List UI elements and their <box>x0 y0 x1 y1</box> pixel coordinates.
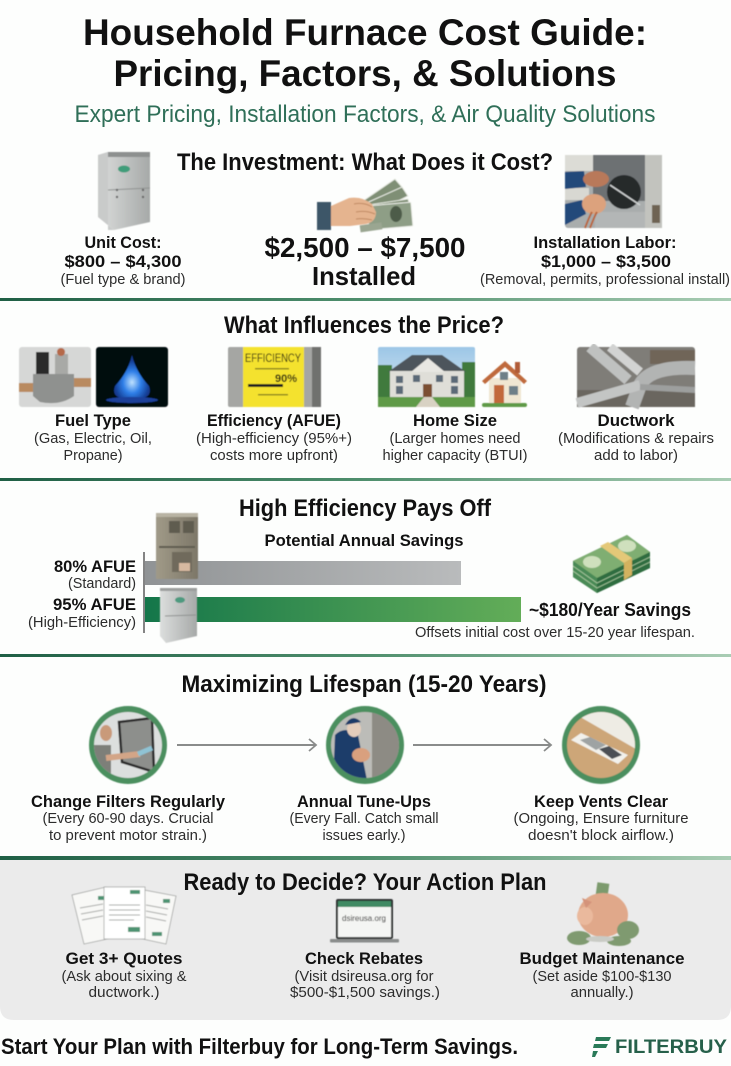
text: ductwork: Ductwork <box>598 411 675 430</box>
text: efficiency: costs more upfront) <box>210 448 338 464</box>
text: change filters <box>31 792 226 844</box>
photo: efficiency label: EFFICIENCY <box>245 351 301 365</box>
text: annual tune-ups: issues early.) <box>322 828 406 844</box>
text: 80% AFUE label: (Standard) <box>68 576 136 592</box>
text: home size: Home Size <box>413 411 497 430</box>
heading: maximizing lifespan: Maximizing Lifespan (15-20 Years) <box>182 671 546 698</box>
photo: technician at furnace <box>565 155 662 228</box>
text: unit cost: Unit Cost: <box>84 233 162 252</box>
text: get quotes: (Ask about sixing & <box>62 969 187 985</box>
bar: 80% AFUE <box>145 561 461 585</box>
footer call to action: Start Your Plan with Filterbuy for Long-Term Savings. <box>1 1034 518 1059</box>
text: savings callout: ~$180/Year Savings <box>529 600 691 620</box>
text: check rebates: (Visit dsireusa.org for <box>294 969 434 985</box>
text: unit cost <box>60 233 186 288</box>
text: home size: higher capacity (BTUI) <box>382 448 528 464</box>
title: Pricing, Factors, & Solutions <box>114 53 616 94</box>
heading: the investment: The Investment: What Does it Cost? <box>177 149 553 176</box>
text: 80% AFUE label: 80% AFUE <box>54 557 136 576</box>
text: fuel type: Fuel Type <box>55 411 131 430</box>
logo: Filterbuy <box>592 1037 727 1058</box>
text: efficiency: (High-efficiency (95%+) <box>196 431 352 447</box>
photo: large house <box>378 347 475 407</box>
logo wordmark: FILTERBUY <box>615 1037 727 1058</box>
panel: high efficiency pays off <box>28 495 695 643</box>
icon: high-efficiency furnace <box>160 588 197 643</box>
text: installation labor: (Removal, permits, professional install) <box>480 272 730 288</box>
text: efficiency <box>196 411 352 464</box>
icon: laptop: dsireusa.org <box>342 914 386 923</box>
text: change filters: Change Filters Regularly <box>31 792 226 811</box>
icon: small house <box>482 361 527 407</box>
text: efficiency: Efficiency (AFUE) <box>207 411 341 430</box>
text: total installed price <box>264 232 466 291</box>
title <box>83 12 647 94</box>
text: get quotes: Get 3+ Quotes <box>66 949 182 968</box>
text: budget maintenance: annually.) <box>570 985 634 1001</box>
panel: the investment <box>60 149 730 291</box>
text: 95% AFUE label: (High-Efficiency) <box>28 615 136 631</box>
bar chart: annual savings <box>144 552 521 633</box>
icon: logo mark <box>592 1037 611 1057</box>
text: savings callout <box>415 600 695 641</box>
heading: action plan: Ready to Decide? Your Action Plan <box>184 869 546 896</box>
title: Household Furnace Cost Guide: <box>83 12 647 53</box>
text: budget maintenance: (Set aside $100-$130 <box>532 969 672 985</box>
panel: what influences the price <box>19 312 714 464</box>
photo: ductwork <box>577 347 695 407</box>
panel: maximizing lifespan <box>31 671 688 844</box>
text: check rebates <box>290 949 440 1001</box>
icon: stack of cash <box>573 535 650 593</box>
text: keep vents clear: Keep Vents Clear <box>534 792 668 811</box>
icon: change filter photo <box>88 705 168 785</box>
text: ductwork: (Modifications & repairs <box>558 431 714 447</box>
icon: standard furnace <box>156 513 198 579</box>
heading: what influences the price: What Influences the Price? <box>224 312 504 339</box>
icon: quote documents <box>72 887 176 944</box>
text: 80% AFUE label <box>54 557 136 592</box>
text: ductwork <box>558 411 714 464</box>
text: home size: (Larger homes need <box>390 431 520 447</box>
text: get quotes <box>62 949 187 1001</box>
panel: action plan <box>0 856 731 1020</box>
panel background <box>0 858 731 1020</box>
text: budget maintenance <box>520 949 684 1001</box>
icon: hand holding cash <box>317 179 413 232</box>
text: get quotes: ductwork.) <box>88 985 160 1001</box>
arrow: step one to two <box>177 739 316 751</box>
text: fuel type: Propane) <box>64 448 122 464</box>
text: change filters: (Every 60-90 days. Crucial <box>42 811 214 827</box>
text: budget maintenance: Budget Maintenance <box>520 949 684 968</box>
text: installation labor: $1,000 – $3,500 <box>541 252 671 271</box>
bar: 95% AFUE <box>145 597 521 622</box>
text: 95% AFUE label: 95% AFUE <box>53 595 136 614</box>
text: total installed price: $2,500 – $7,500 <box>264 232 466 263</box>
icon: piggy bank with cash <box>567 882 639 946</box>
text: installation labor: Installation Labor: <box>534 233 676 252</box>
text: change filters: to prevent motor strain.) <box>49 828 207 844</box>
text: annual tune-ups: Annual Tune-Ups <box>297 792 431 811</box>
text: home size <box>382 411 528 464</box>
text: keep vents clear: doesn't block airflow.) <box>528 828 674 844</box>
text: check rebates: Check Rebates <box>305 949 423 968</box>
photo: efficiency label: 90% <box>275 373 297 385</box>
text: savings callout: Offsets initial cost over 15-20 year lifespan. <box>415 624 695 641</box>
text: fuel type <box>34 411 152 464</box>
icon: furnace unit <box>98 152 150 230</box>
text: unit cost: $800 – $4,300 <box>64 252 182 271</box>
photo: efficiency label <box>228 347 321 407</box>
subtitle: Expert Pricing, Installation Factors, & Air Quality Solutions <box>74 101 656 128</box>
text: installation labor <box>480 233 730 288</box>
text: ductwork: add to labor) <box>594 448 678 464</box>
icon: floor vent photo <box>561 705 641 785</box>
text: check rebates: $500-$1,500 savings.) <box>290 985 440 1001</box>
text: annual tune-ups <box>290 792 438 844</box>
text: annual tune-ups: (Every Fall. Catch small <box>290 811 438 827</box>
text: total installed price: Installed <box>312 261 416 291</box>
icon: laptop <box>330 899 399 942</box>
heading: high efficiency: High Efficiency Pays Off <box>239 495 492 522</box>
photo: blue gas flame <box>96 347 168 407</box>
text: keep vents clear <box>514 792 688 844</box>
arrow: step two to three <box>413 739 551 751</box>
icon: technician photo <box>325 705 405 785</box>
text: keep vents clear: (Ongoing, Ensure furniture <box>514 811 688 827</box>
text: 95% AFUE label <box>28 595 136 631</box>
text: fuel type: (Gas, Electric, Oil, <box>34 431 152 447</box>
text: unit cost: (Fuel type & brand) <box>60 272 186 288</box>
chart heading: Potential Annual Savings <box>264 532 464 550</box>
photo: gas valve <box>19 347 91 407</box>
